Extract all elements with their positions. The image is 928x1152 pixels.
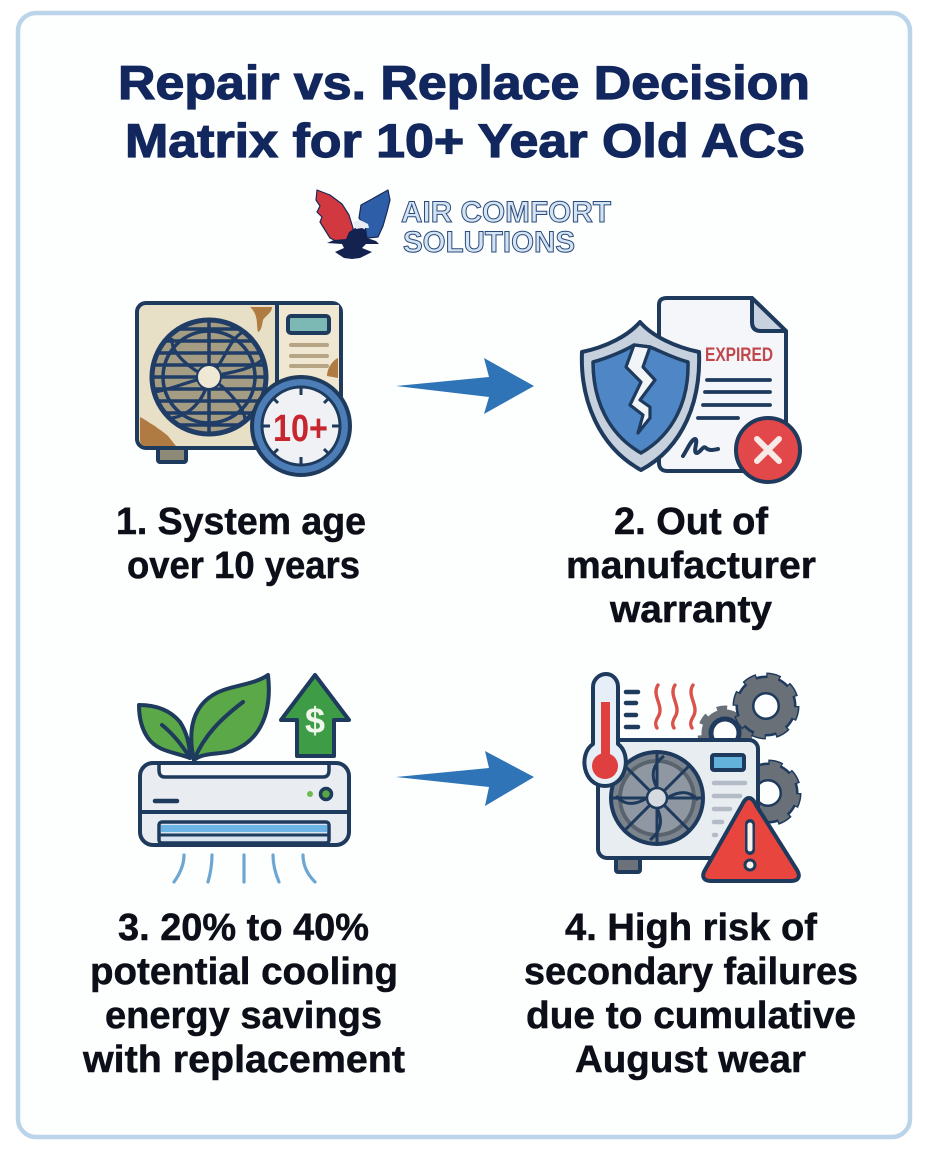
leaves (139, 675, 269, 760)
arrow: step 3 to step 4 (396, 751, 534, 806)
logo: Air Comfort Solutions (316, 190, 611, 259)
gears (701, 678, 796, 821)
indoor unit (140, 763, 349, 845)
icon: eagle (316, 190, 390, 259)
fan (611, 752, 703, 844)
savings arrow (281, 675, 349, 756)
heat waves (656, 685, 695, 728)
label: step 4 (524, 907, 858, 1081)
clock badge: 10+ (273, 408, 328, 450)
airflow lines (174, 855, 315, 882)
label: step 1: over 10 years (127, 545, 360, 587)
clock badge (252, 377, 350, 475)
label: step 4: due to cumulative (526, 995, 856, 1037)
label: step 4: August wear (575, 1039, 806, 1081)
icon: overheating unit with failure risk (584, 674, 799, 881)
label: step 3: potential cooling (90, 951, 398, 993)
title: Matrix for 10+ Year Old ACs (125, 114, 805, 167)
label: step 3 (82, 907, 405, 1081)
warning triangle (703, 798, 799, 881)
thermometer (584, 674, 638, 786)
arrow: step 1 to step 2 (396, 358, 534, 414)
title: Repair vs. Replace Decision (118, 56, 810, 109)
red x badge (736, 418, 800, 482)
savings arrow: $ (305, 700, 325, 741)
label: step 2: manufacturer (566, 545, 816, 587)
icon: aged outdoor AC unit with 10+ clock (137, 303, 350, 475)
logo wordmark: SOLUTIONS (403, 226, 575, 259)
logo wordmark: AIR COMFORT (401, 196, 611, 229)
label: step 4: 4. High risk of (565, 907, 817, 949)
document (659, 298, 786, 471)
icon: efficient AC with leaves and savings arrow (139, 675, 349, 882)
label: step 2: 2. Out of (614, 501, 768, 543)
document: EXPIRED (705, 344, 773, 366)
logo wordmark (401, 196, 611, 259)
label: step 3: energy savings (105, 995, 382, 1037)
label: step 1 (116, 501, 366, 587)
label: step 3: 3. 20% to 40% (118, 907, 369, 949)
broken shield (582, 322, 699, 470)
label: step 2: warranty (609, 589, 772, 631)
title (118, 56, 810, 167)
label: step 2 (566, 501, 816, 631)
label: step 1: 1. System age (116, 501, 366, 543)
label: step 4: secondary failures (524, 951, 858, 993)
icon: expired warranty (582, 298, 800, 482)
feet and unit (616, 857, 640, 872)
label: step 3: with replacement (82, 1039, 405, 1081)
